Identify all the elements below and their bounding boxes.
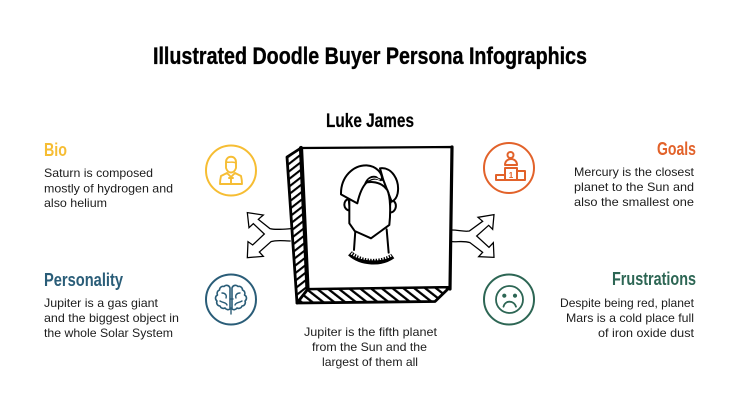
persona card: [287, 147, 452, 303]
text: central description: Jupiter is the fifth planet: [304, 325, 438, 339]
text: central description: [304, 325, 438, 369]
card front face: [301, 147, 452, 289]
text: bio description: mostly of hydrogen and: [44, 182, 173, 196]
persona name: Luke James: [326, 111, 414, 132]
text: frustrations description: Despite being red, planet: [560, 296, 695, 310]
card heavy edges: [301, 148, 308, 289]
text: frustrations description: of iron oxide dust: [598, 326, 695, 340]
text: frustrations description: [560, 296, 695, 340]
heading: personality: Personality: [44, 270, 123, 290]
text: personality description: [44, 296, 179, 340]
text: central description: from the Sun and the: [312, 340, 427, 354]
text: bio description: Saturn is composed: [44, 166, 153, 180]
text: central description: largest of them all: [322, 355, 418, 369]
text: goals description: planet to the Sun and: [574, 180, 694, 194]
arrow: right fork: [452, 215, 494, 257]
text: goals description: [574, 165, 695, 209]
panel: bio: [44, 140, 256, 210]
text: personality description: and the biggest object in: [44, 311, 179, 325]
panel: goals: [484, 139, 696, 209]
text: goals description: also the smallest one: [574, 195, 694, 209]
text: frustrations description: Mars is a cold place full: [566, 311, 694, 325]
icon: podium in circle: [484, 143, 534, 193]
icon: sad face in circle: [484, 274, 534, 324]
text: goals description: Mercury is the closest: [574, 165, 695, 179]
title: Illustrated Doodle Buyer Persona Infographics: [153, 43, 587, 70]
text: personality description: the whole Solar System: [44, 326, 173, 340]
panel: frustrations: [484, 269, 696, 340]
card right edge: [450, 147, 452, 289]
text: personality description: Jupiter is a gas giant: [44, 296, 159, 310]
heading: bio: Bio: [44, 140, 67, 160]
card left side hatching: [287, 148, 308, 303]
icon: brain in circle: [206, 274, 256, 324]
icon: businessman in circle: [206, 146, 256, 196]
text: bio description: also helium: [44, 196, 107, 210]
arrow: left fork: [247, 213, 291, 258]
icon: faceless man portrait: [341, 165, 398, 262]
panel: personality: [44, 270, 256, 340]
heading: goals: Goals: [657, 139, 696, 159]
text: bio description: [44, 166, 173, 210]
heading: frustrations: Frustrations: [612, 269, 696, 289]
icon: podium in circle: 1: [509, 171, 514, 180]
card bottom side hatching: [297, 287, 450, 303]
